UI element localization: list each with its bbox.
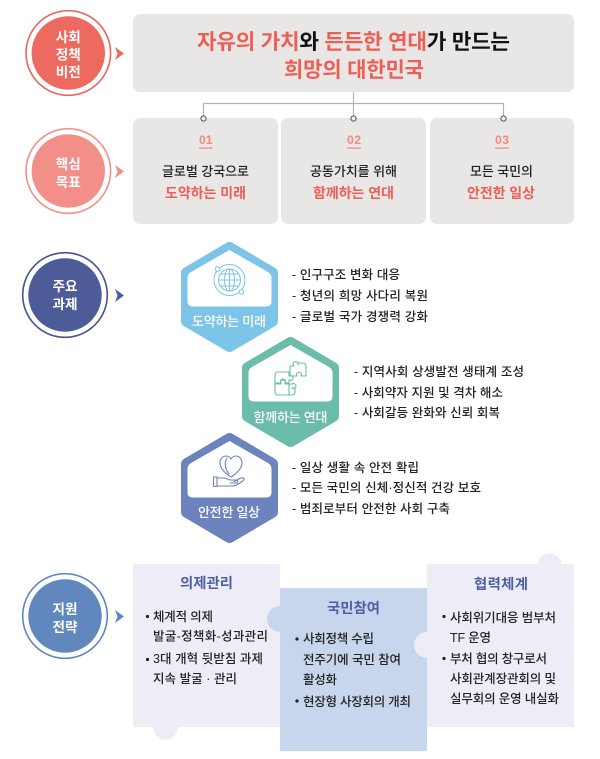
badge: social policy vision: 사회 [56,30,81,45]
badge: main tasks: 과제 [52,297,78,312]
badge: social policy vision: 정책 [56,48,81,62]
arrow: goals [115,165,124,178]
badge: support strategy: 전략 [52,620,78,635]
icon: globe [214,264,245,296]
list: safety tasks [292,460,481,516]
panel: agenda management: 3대 개혁 뒷받침 과제 [153,651,263,666]
panel: vision statement: 자유의 가치와 든든한 연대가 만드는 [197,30,510,54]
panel: vision statement [133,14,574,92]
panel: public participation: 사회정책 수립 [303,631,374,646]
panel: public participation: 전주기에 국민 참여 [303,653,401,667]
panel: goal 01: 01 [199,133,213,147]
badge: core goals [26,129,111,213]
badge: main tasks [23,253,107,337]
badge: social policy vision [26,11,111,95]
panel: public participation [267,588,427,751]
list: safety tasks: - 일상 생활 속 안전 확립 [292,460,419,475]
panel: goal 02 [281,118,426,224]
panel: goal 01 [133,118,278,224]
panel: public participation: 현장형 사장회의 개최 [303,694,411,709]
panel: vision statement: 희망의 대한민국 [284,59,424,82]
connector lines [201,92,506,121]
panel: agenda management: 체계적 의제 [153,610,213,624]
panel: public participation: 활성화 [303,672,337,687]
panel: cooperation system: 사회관계장관회의 및 [450,672,556,686]
badge: core goals: 목표 [56,175,81,190]
list: safety tasks: - 범죄로부터 안전한 사회 구축 [292,502,450,516]
panel: cooperation system: 실무회의 운영 내실화 [450,692,559,706]
panel: goal 01: 도약하는 미래 [165,185,246,201]
panel: agenda management: 의제관리 [180,575,233,592]
panel: goal 03: 모든 국민의 [470,164,533,179]
list: solidarity tasks: - 사회갈등 완화와 신뢰 회복 [354,406,500,420]
panel: public participation: 국민참여 [327,600,380,617]
panel: agenda management: 발굴-정책화-성과관리 [153,628,268,644]
list: leaping future tasks: - 청년의 희망 사다리 복원 [292,289,428,303]
panel: cooperation system: 협력체계 [474,576,528,593]
panel: goal 02: 공동가치를 위해 [310,164,397,179]
badge: support strategy [23,574,107,658]
badge: core goals: 핵심 [56,157,81,172]
arrow: vision [115,47,124,60]
list: leaping future tasks: - 글로벌 국가 경쟁력 강화 [292,310,428,324]
badge: support strategy: 지원 [52,602,78,617]
panel: goal 03: 03 [495,133,509,147]
hexagon: solidarity: 함께하는 연대 [254,410,328,425]
list: solidarity tasks: - 사회약자 지원 및 격차 해소 [354,386,503,400]
panel: goal 01: 글로벌 강국으로 [162,164,249,179]
panel: goal 03: 안전한 일상 [467,185,535,201]
badge: social policy vision: 비전 [56,65,81,80]
panel: cooperation system [414,554,574,727]
panel: cooperation system: TF 운영 [450,631,491,645]
icon: puzzle [275,362,306,395]
hexagon: leaping future: 도약하는 미래 [192,314,266,329]
hexagon: solidarity [248,343,333,441]
badge: main tasks: 주요 [52,279,78,294]
panel: agenda management [133,564,280,740]
list: leaping future tasks [292,268,428,324]
list: solidarity tasks: - 지역사회 상생발전 생태계 조성 [354,364,524,379]
panel: goal 02: 함께하는 연대 [313,185,394,201]
list: leaping future tasks: - 인구구조 변화 대응 [292,268,400,282]
panel: cooperation system: 사회위기대응 범부처 [450,611,556,625]
hexagon: safe daily life: 안전한 일상 [198,505,260,520]
panel: goal 03 [430,118,574,224]
arrow: tasks [115,289,124,302]
panel: goal 02: 02 [347,133,361,147]
hexagon: safe daily life [187,439,272,537]
hexagon: leaping future [187,248,272,346]
arrow: strategy [115,610,124,623]
list: solidarity tasks [354,364,524,420]
icon: heart in hand [214,456,244,486]
panel: agenda management: 지속 발굴 · 관리 [153,672,237,686]
list: safety tasks: - 모든 국민의 신체·정신적 건강 보호 [292,481,481,495]
panel: cooperation system: 부처 협의 창구로서 [450,651,547,666]
